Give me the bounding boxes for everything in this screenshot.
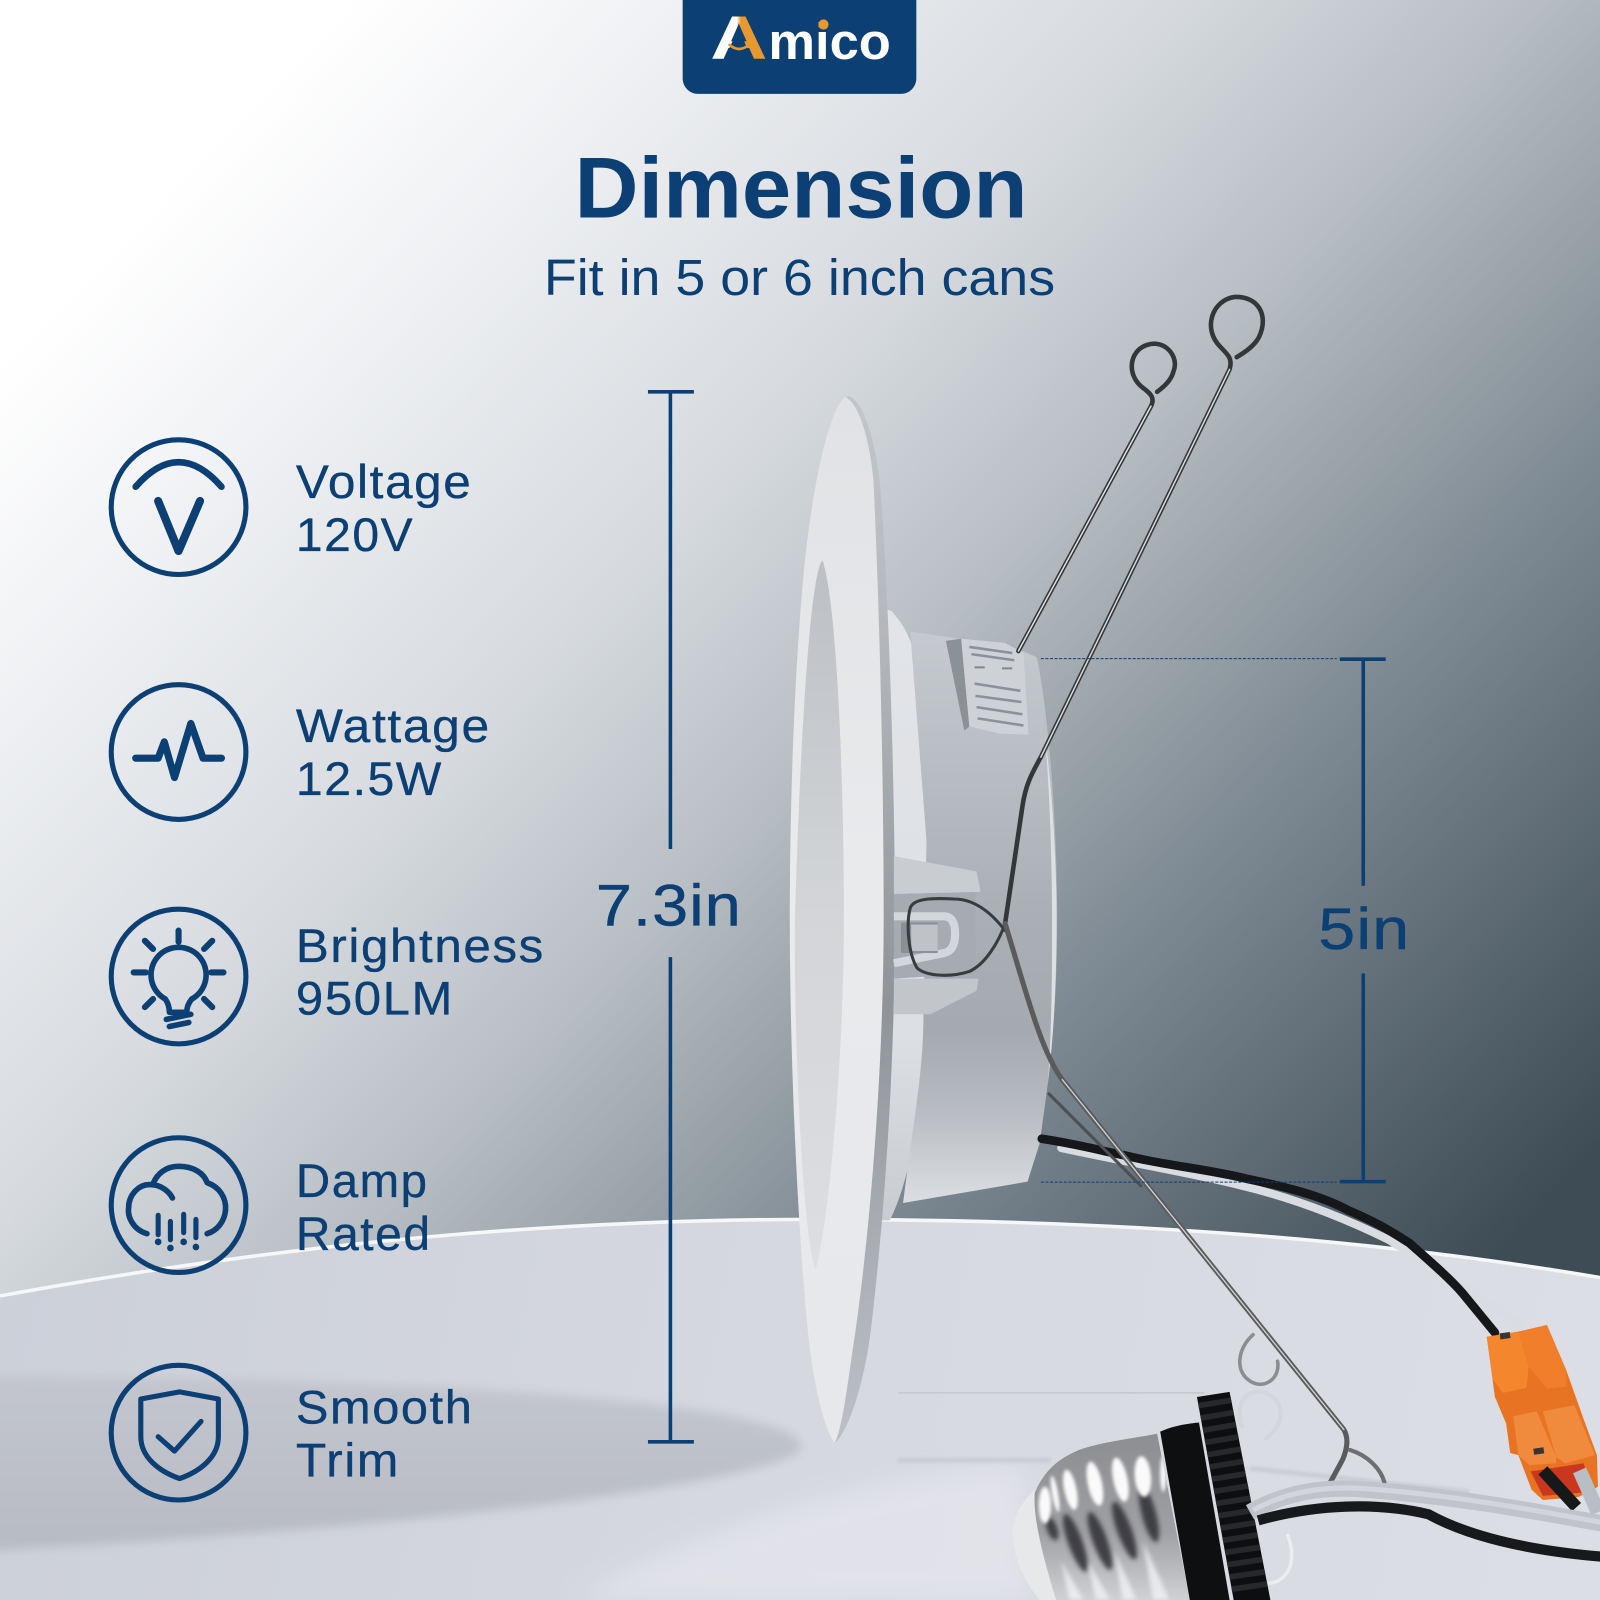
socket collar bbox=[1160, 1422, 1230, 1600]
voltage label bbox=[296, 456, 472, 561]
trim face bbox=[790, 397, 884, 1443]
connector latches bbox=[1500, 1332, 1511, 1339]
wattage label: Wattage bbox=[296, 700, 491, 752]
housing collar bbox=[878, 608, 929, 1220]
subtitle: Fit in 5 or 6 inch cans bbox=[544, 249, 1055, 306]
feature: voltage bbox=[111, 440, 472, 574]
table bright reflection bbox=[571, 1469, 1031, 1600]
wattage label bbox=[296, 700, 491, 805]
wattage label: 12.5W bbox=[296, 753, 443, 805]
brightness label: Brightness bbox=[296, 920, 545, 972]
product: socket cables bbox=[1250, 1488, 1600, 1557]
brightness label: 950LM bbox=[296, 972, 454, 1024]
icon: wattage pulse bbox=[111, 685, 246, 819]
lower wire foot hook bbox=[1350, 1450, 1385, 1484]
spring clip tab bbox=[946, 639, 1029, 735]
logo badge: A bbox=[710, 4, 767, 72]
smooth trim label: Trim bbox=[296, 1435, 400, 1487]
feature: wattage bbox=[111, 685, 491, 819]
socket white tip bbox=[1013, 1488, 1071, 1600]
upper wire left bbox=[1018, 344, 1175, 651]
product: white and black lead wires bbox=[1042, 1139, 1519, 1333]
height measure: 5in bbox=[1041, 659, 1410, 1182]
feature: smooth trim bbox=[111, 1365, 473, 1500]
connector wire ends bbox=[1543, 1470, 1577, 1507]
logo badge: mico bbox=[768, 13, 891, 70]
upper wire right with bend bbox=[1005, 297, 1263, 923]
product: spring clip wires bbox=[908, 297, 1385, 1584]
trim inner opening bbox=[795, 560, 844, 1270]
product: downlight bbox=[790, 396, 1057, 1443]
smooth trim label bbox=[296, 1381, 473, 1487]
bracket loop wire bbox=[908, 899, 1005, 975]
housing right rim bbox=[1045, 735, 1057, 1083]
icon: light bulb bbox=[111, 909, 246, 1044]
label 5in: 5in bbox=[1318, 897, 1410, 962]
damp rated label bbox=[296, 1155, 432, 1260]
product: screw socket bbox=[1013, 1388, 1286, 1600]
brightness label bbox=[296, 920, 545, 1024]
voltage label: Voltage bbox=[296, 456, 472, 508]
feature: damp rated bbox=[111, 1138, 432, 1272]
feature: brightness bbox=[111, 909, 545, 1044]
table surface bbox=[0, 1219, 1600, 1600]
voltage label: 120V bbox=[296, 509, 414, 561]
socket metal thread bbox=[1034, 1434, 1190, 1600]
icon: rain cloud bbox=[111, 1138, 246, 1272]
damp rated label: Rated bbox=[296, 1208, 432, 1260]
title: Dimension bbox=[574, 139, 1028, 236]
smooth trim label: Smooth bbox=[296, 1381, 473, 1433]
lower wire bbox=[1005, 923, 1347, 1484]
mounting bracket bbox=[894, 856, 981, 1014]
height measure: 7.3in bbox=[596, 392, 742, 1442]
logo badge bbox=[683, 0, 916, 94]
icon: voltage bbox=[111, 440, 246, 574]
trim edge bbox=[835, 396, 895, 1443]
reflections of wire loops bbox=[1240, 1392, 1281, 1439]
damp rated label: Damp bbox=[296, 1155, 429, 1207]
trim shadow on table bbox=[0, 1376, 801, 1551]
icon: shield check bbox=[111, 1365, 246, 1500]
product: orange connector bbox=[1487, 1325, 1598, 1512]
socket knurled disc bbox=[1197, 1392, 1270, 1600]
housing body bbox=[903, 632, 1057, 1203]
lower wire loop bbox=[1240, 1335, 1278, 1384]
label 7.3in: 7.3in bbox=[596, 874, 742, 939]
